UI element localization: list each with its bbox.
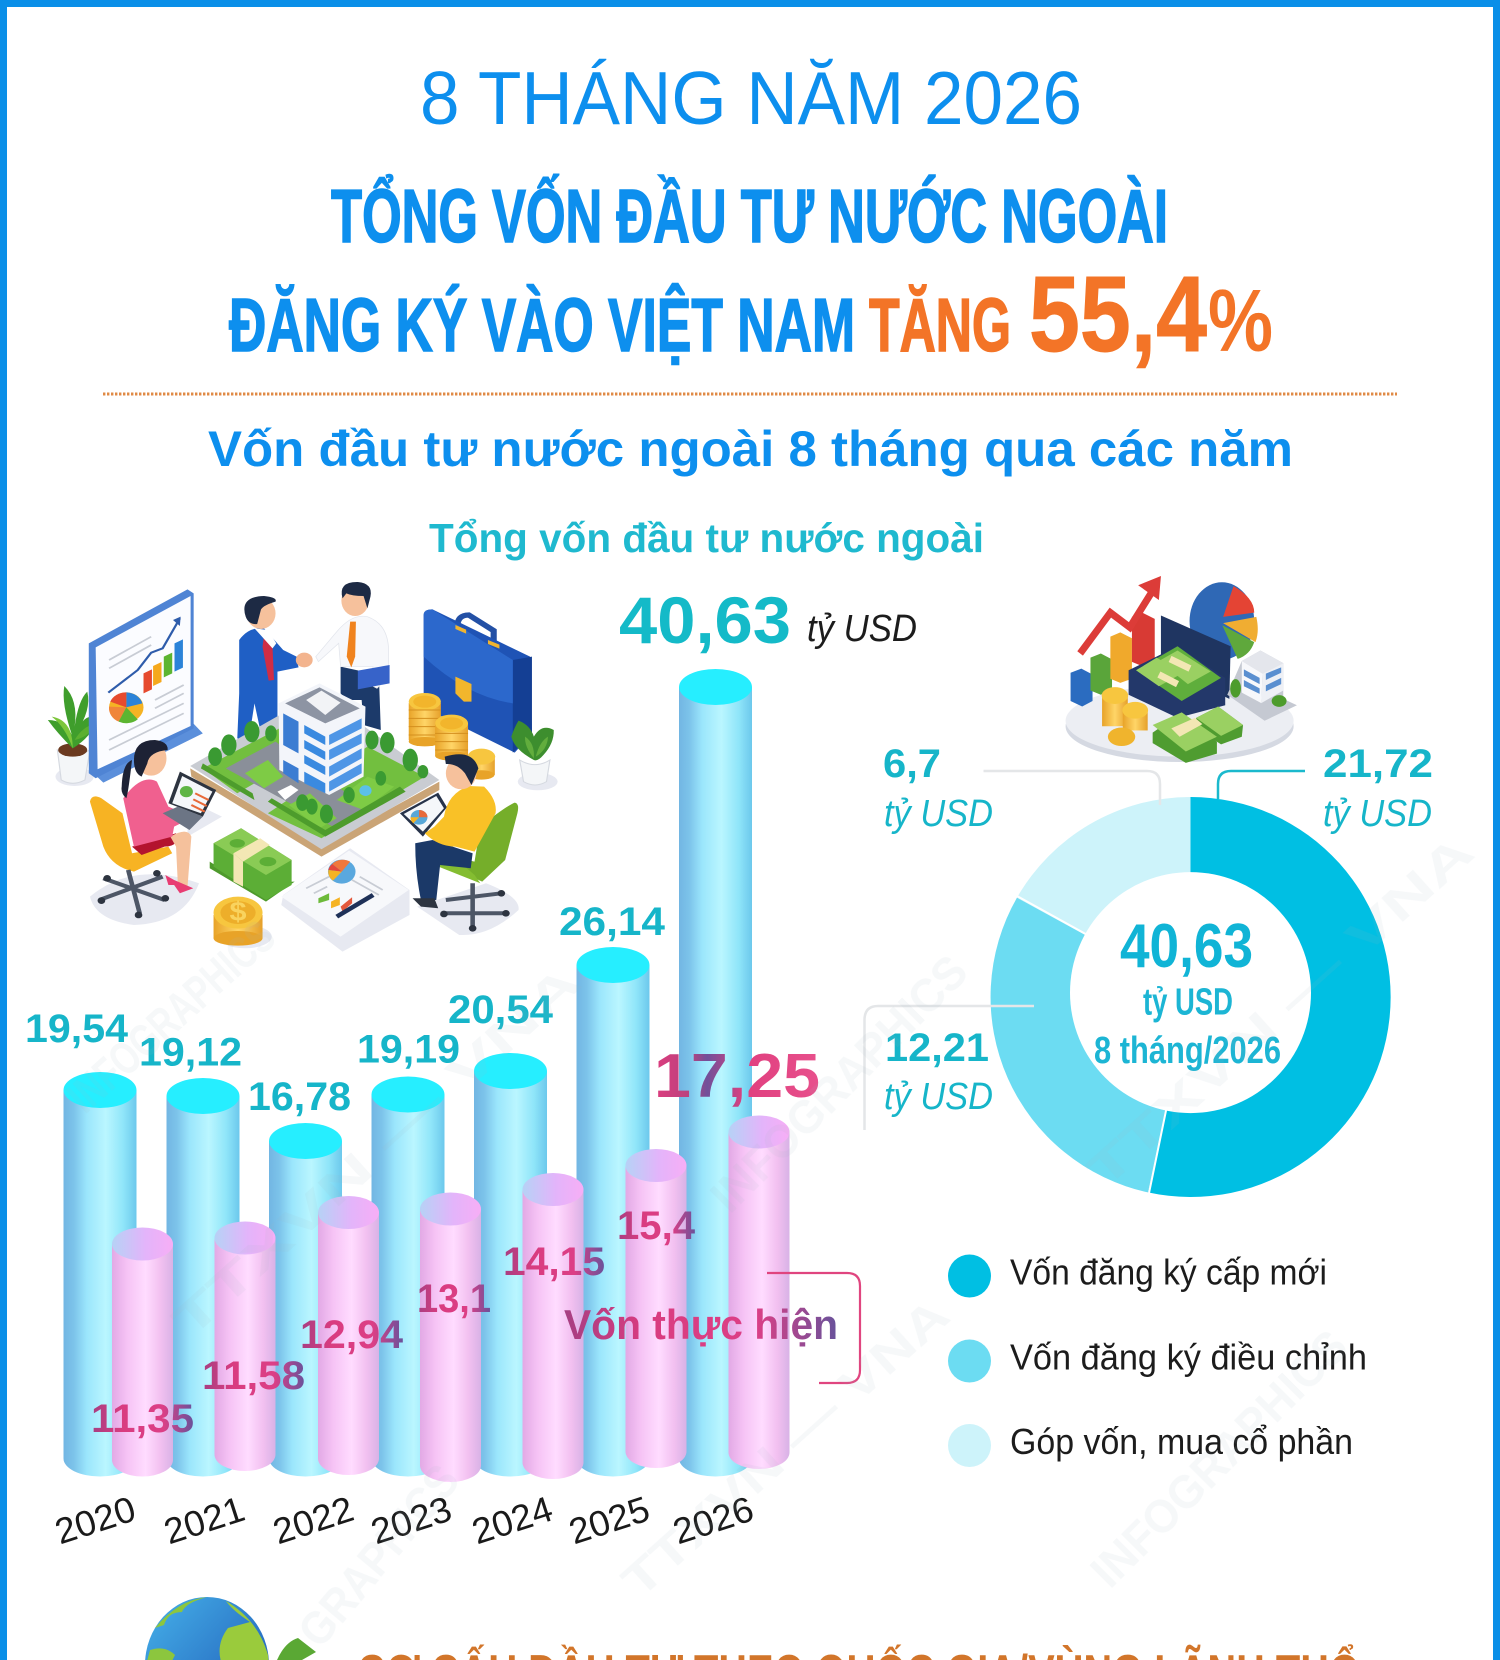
coins (1102, 687, 1148, 746)
watermarks: TTXVN — VNA (162, 954, 591, 1347)
bracket (767, 1273, 860, 1383)
disbursed capital values: 12,94 (300, 1313, 404, 1357)
leader lines (984, 771, 1160, 805)
money stack (210, 828, 295, 902)
donut center text (1094, 912, 1281, 1072)
total capital values: 20,54 (448, 988, 554, 1032)
highlight: tăng: TĂNG (869, 283, 1011, 367)
highlight: percent: % (1208, 271, 1273, 370)
donut hole (1070, 872, 1311, 1113)
year axis labels: 2025 (564, 1488, 654, 1552)
donut center text: 40,63 (1120, 912, 1253, 981)
office building (279, 683, 365, 795)
watermarks: INFOGRAPHICS (1080, 1320, 1357, 1597)
disbursed capital values: 11,35 (91, 1397, 194, 1441)
blue columns: total registered capital (64, 669, 752, 1476)
woman with laptop (90, 740, 216, 918)
year axis labels: 2026 (668, 1488, 758, 1552)
disbursed capital values: 13,1 (417, 1277, 491, 1321)
businessman left (237, 596, 313, 740)
segment: new registered (1148, 797, 1391, 1197)
headline value 2026: 40,63 (619, 583, 791, 657)
presentation board (89, 589, 203, 783)
year axis labels: 2022 (268, 1488, 358, 1552)
pink columns: disbursed capital (112, 1116, 790, 1482)
businessman right (316, 582, 390, 730)
plant left (48, 686, 96, 783)
title line 1: 8 THÁNG NĂM 2026 (420, 56, 1082, 140)
total capital values (25, 900, 666, 1119)
pie chart (1190, 582, 1258, 660)
disbursed capital values: 15,4 (617, 1204, 696, 1248)
document stack (281, 848, 409, 952)
disbursed capital values: 11,58 (202, 1354, 305, 1398)
single coin stack: $ (230, 897, 247, 927)
plant right (511, 721, 554, 785)
title block (229, 56, 1273, 374)
bar chart: foreign investment by year (25, 583, 917, 1552)
illustration: investors and building (48, 582, 558, 952)
label 12,21 (884, 1026, 993, 1118)
cash stacks (1153, 706, 1243, 763)
watermarks: INFOGRAPHICS (700, 945, 977, 1222)
total capital values: 26,14 (559, 900, 666, 944)
coin stacks (409, 693, 495, 780)
label 21,72: tỷ USD (1323, 793, 1432, 835)
arrow (1080, 587, 1155, 653)
suitcase with cash (1129, 616, 1231, 718)
disbursed capital values: 14,15 (503, 1240, 605, 1284)
shadows (55, 767, 558, 948)
section heading: Vốn đầu tư nước ngoài 8 tháng qua các năm (208, 421, 1293, 477)
chart heading: Tổng vốn đầu tư nước ngoài (429, 515, 984, 561)
label 12,21: tỷ USD (884, 1076, 993, 1118)
year axis labels (50, 1488, 758, 1552)
legend item: adjusted: Vốn đăng ký điều chỉnh (1010, 1336, 1367, 1378)
legend item: new registered: Vốn đăng ký cấp mới (1010, 1252, 1327, 1292)
legend (948, 1252, 1367, 1467)
donut chart (864, 742, 1433, 1197)
watermarks: INFOGRAPHICS (57, 910, 285, 1122)
total capital values: 19,54 (25, 1007, 129, 1051)
year axis labels: 2020 (50, 1488, 140, 1552)
legend item: capital contribution: Góp vốn, mua cổ phần (1010, 1421, 1353, 1462)
title line 3: ĐĂNG KÝ VÀO VIỆT NAM (229, 283, 855, 367)
year axis labels: 2024 (467, 1488, 557, 1552)
total capital values: 19,12 (139, 1030, 242, 1074)
illustration: money, charts and building on a plate (1066, 576, 1297, 763)
watermarks: TTXVN — VNA (612, 1288, 959, 1607)
segment: adjusted registered (991, 898, 1190, 1192)
label 21,72: 21,72 (1323, 742, 1433, 786)
growth bars (1071, 613, 1155, 706)
highlighted disbursed value 2026: 17,25 (654, 1042, 820, 1111)
donut center text: tỷ USD (1143, 982, 1233, 1024)
icon: green dollar (277, 1638, 316, 1660)
watermarks: TTXVN — VNA (1077, 824, 1483, 1197)
plate (1066, 690, 1294, 762)
total capital values: 19,19 (357, 1028, 460, 1072)
highlight: 55,4: 55,4 (1029, 253, 1207, 374)
total capital values: 16,78 (248, 1075, 351, 1119)
donut center text: 8 tháng/2026 (1094, 1030, 1281, 1072)
single coin stack (214, 897, 263, 946)
disbursed capital values (91, 1204, 696, 1441)
label 12,21: 12,21 (885, 1026, 989, 1070)
man with tablet (400, 754, 518, 932)
briefcase (424, 609, 532, 753)
label 6,7 (883, 742, 993, 835)
model site (190, 693, 439, 857)
label: disbursed capital: Vốn thực hiện (564, 1301, 838, 1348)
label 6,7: tỷ USD (884, 793, 993, 835)
small office (1227, 650, 1297, 721)
label 21,72 (1323, 742, 1433, 835)
unit: tỷ USD (807, 608, 917, 650)
year axis labels: 2023 (366, 1488, 456, 1552)
segment: capital contribution (1017, 797, 1190, 993)
label 6,7: 6,7 (883, 742, 941, 786)
icon: globe (145, 1597, 316, 1660)
year axis labels: 2021 (159, 1488, 249, 1552)
watermarks (57, 824, 1483, 1656)
watermarks: GRAPHICS (288, 1454, 469, 1656)
